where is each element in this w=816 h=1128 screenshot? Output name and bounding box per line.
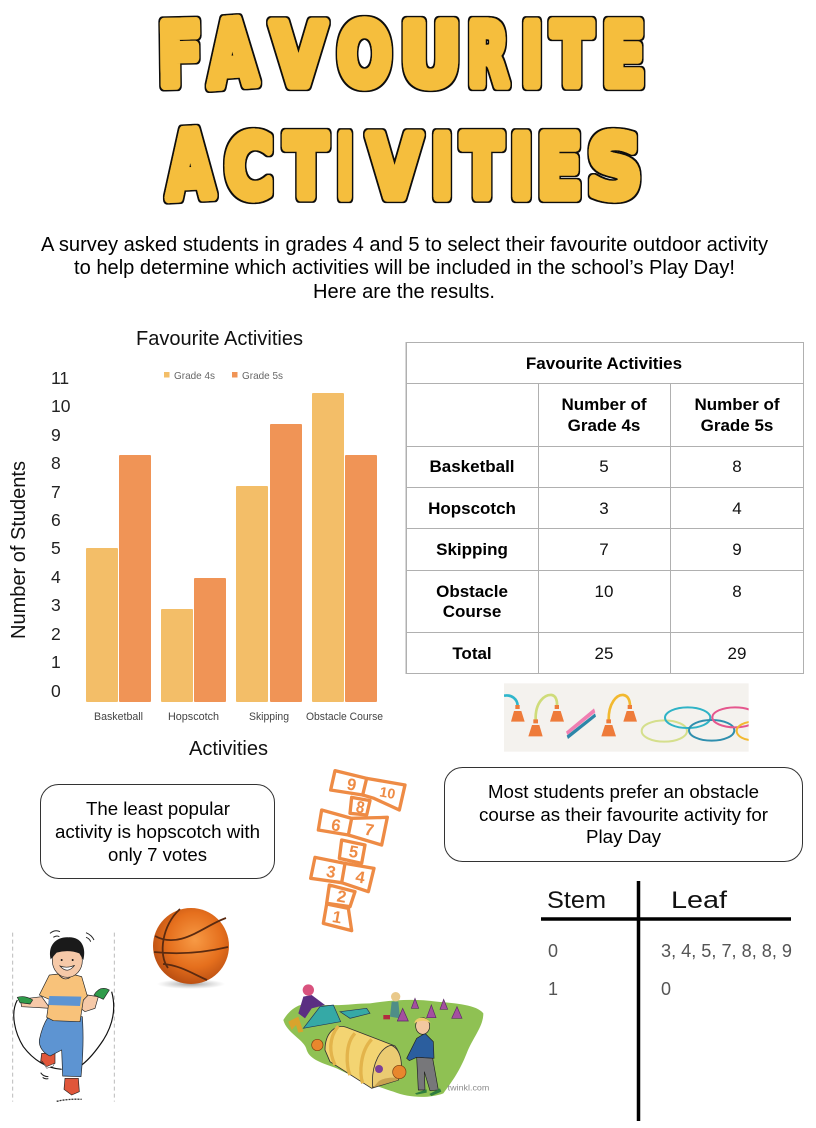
table values: 7 — [599, 540, 609, 559]
intro text: A survey asked students in grades 4 and 5 to select their favourite outdoor activity — [41, 234, 768, 256]
title: Favourite Activities — [158, 1, 645, 220]
table values — [595, 457, 746, 663]
table values: 5 — [599, 457, 609, 476]
illustration: hopscotch: 1 — [331, 907, 343, 927]
table headings — [428, 354, 780, 663]
title: Favourite Activities: T — [462, 119, 502, 217]
table values: 8 — [732, 582, 742, 601]
title: Favourite Activities: I — [337, 117, 353, 217]
table headings: Basketball — [429, 457, 515, 476]
y axis numbers: 4 — [51, 567, 61, 587]
table headings: Favourite Activities — [526, 354, 682, 373]
illustration: hopscotch: 5 — [347, 842, 360, 862]
table values: 9 — [732, 540, 742, 559]
plot values: 0 — [661, 979, 671, 999]
illustration: hopscotch: 2 — [335, 886, 348, 907]
title: Favourite Activities: F — [158, 5, 203, 105]
title: Favourite Activities: O — [338, 6, 391, 105]
legend: Grade 4s — [174, 370, 215, 382]
stem and leaf plot — [541, 881, 792, 1121]
y axis numbers: 8 — [51, 453, 61, 473]
title: Favourite Activities: S — [588, 118, 641, 217]
data table — [406, 342, 804, 674]
table headings: Number of — [562, 395, 647, 414]
illustration: cones and hoops — [504, 683, 770, 752]
intro text: Here are the results. — [313, 281, 495, 303]
illustration: hopscotch: 8 — [354, 798, 366, 818]
y axis numbers: 1 — [51, 652, 61, 672]
title: Favourite Activities: E — [538, 117, 581, 217]
title: Favourite Activities: I — [522, 5, 542, 105]
table headings: Skipping — [436, 540, 508, 559]
left callout: only 7 votes — [108, 844, 207, 865]
bar chart: favourite activities — [8, 328, 383, 760]
plot headings — [547, 887, 727, 914]
title: Favourite Activities: A — [166, 113, 215, 220]
table headings: Total — [452, 644, 492, 663]
y axis numbers: 3 — [51, 595, 61, 615]
left callout: activity is hopscotch with — [55, 821, 260, 842]
left callout: The least popular — [86, 798, 230, 819]
table headings: Obstacle — [436, 582, 508, 601]
y axis numbers: 9 — [51, 425, 61, 445]
plot axes — [541, 881, 791, 1121]
table headings: Number of — [694, 395, 780, 414]
table headings: Course — [443, 602, 501, 621]
table headings: Grade 5s — [701, 416, 773, 435]
table values: 8 — [732, 457, 742, 476]
y axis numbers: 0 — [51, 681, 61, 701]
category labels: Hopscotch — [168, 711, 219, 723]
left callout — [40, 784, 274, 878]
title: Favourite Activities: T — [552, 7, 592, 105]
category labels — [94, 711, 383, 723]
y axis numbers: 6 — [51, 510, 61, 530]
illustration: hopscotch: 9 — [345, 774, 358, 795]
category labels: Skipping — [249, 711, 289, 723]
plot headings: Stem — [547, 887, 606, 914]
legend: Grade 5s — [242, 370, 283, 382]
intro text: to help determine which activities will be included in the school’s Play Day! — [74, 257, 735, 279]
table headings: Hopscotch — [428, 499, 516, 518]
title: Favourite Activities: T — [285, 118, 327, 217]
y axis numbers — [51, 368, 71, 701]
title: Favourite Activities: U — [400, 6, 461, 105]
intro text — [41, 234, 768, 303]
table values: 4 — [732, 499, 742, 518]
y axis numbers: 5 — [51, 538, 61, 558]
y axis numbers: 7 — [51, 482, 61, 502]
y axis numbers: 11 — [51, 368, 69, 388]
illustration: hopscotch: 4 — [354, 867, 367, 888]
chart title: Favourite Activities — [136, 328, 303, 350]
title: Favourite Activities: C — [225, 118, 273, 217]
table headings: Grade 4s — [568, 416, 640, 435]
title: Favourite Activities: E — [602, 6, 645, 105]
right callout: Play Day — [586, 826, 662, 847]
illustration: hopscotch — [311, 771, 405, 931]
bars: Grade 5s — [119, 424, 377, 702]
plot values: 0 — [548, 941, 558, 961]
y axis numbers: 2 — [51, 624, 61, 644]
x axis title: Activities — [189, 738, 268, 760]
table values: 3 — [599, 499, 609, 518]
title: Favourite Activities: A — [207, 1, 258, 107]
illustration: obstacle course scene — [283, 984, 489, 1097]
illustration: basketball — [153, 908, 229, 989]
plot headings: Leaf — [671, 887, 727, 914]
illustration: obstacle course scene: twinkl.com — [448, 1083, 489, 1093]
table values: 10 — [595, 582, 613, 601]
category labels: Basketball — [94, 711, 143, 723]
illustration: hopscotch: 7 — [363, 820, 375, 840]
y axis numbers: 10 — [51, 396, 71, 416]
table values: 25 — [595, 644, 613, 663]
table grid — [406, 342, 804, 674]
table values: 29 — [728, 644, 746, 663]
plot values: 1 — [548, 979, 558, 999]
title: Favourite Activities: V — [271, 7, 326, 105]
title: Favourite Activities: R — [468, 5, 508, 105]
plot values — [548, 941, 792, 999]
right callout: Most students prefer an obstacle — [488, 781, 759, 802]
title: Favourite Activities: I — [511, 119, 532, 217]
category labels: Obstacle Course — [306, 711, 383, 723]
plot values: 3, 4, 5, 7, 8, 8, 9 — [661, 941, 792, 961]
title: Favourite Activities: I — [432, 117, 452, 217]
right callout — [444, 768, 802, 862]
legend — [164, 370, 283, 382]
illustration: hopscotch: 3 — [325, 862, 337, 882]
illustration: boy skipping — [13, 931, 114, 1102]
right callout: course as their favourite activity for — [479, 804, 768, 825]
illustration: hopscotch: 10 — [378, 784, 397, 803]
title: Favourite Activities: V — [368, 119, 421, 217]
illustration: hopscotch: 6 — [330, 815, 342, 835]
bars: Grade 4s — [86, 393, 344, 702]
y axis title: Number of Students — [8, 461, 30, 639]
